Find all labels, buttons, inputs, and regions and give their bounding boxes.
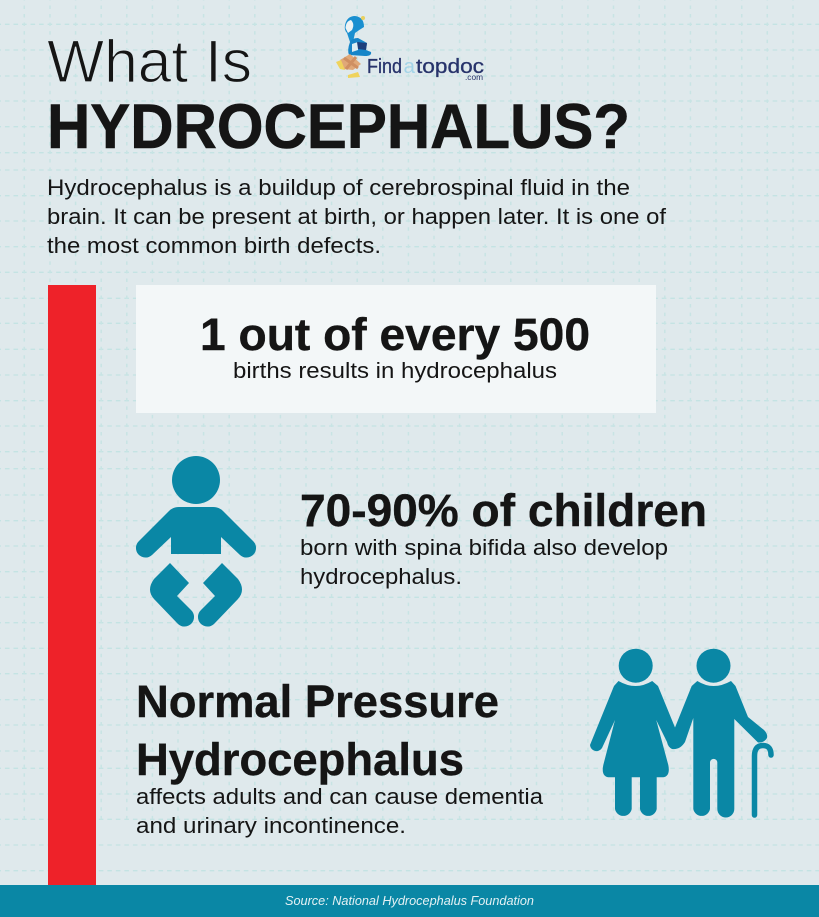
intro paragraph: the most common birth defects. — [47, 233, 381, 258]
statistic heading: 1 out of every 500 — [200, 309, 590, 360]
logo wordmark: Find — [367, 56, 402, 78]
stat description: born with spina bifida also develop — [300, 535, 668, 560]
stat description: affects adults and can cause dementia — [136, 784, 544, 809]
icon: duck mascot — [336, 16, 371, 78]
footer band — [0, 885, 819, 917]
logo wordmark: a — [404, 56, 416, 78]
stat heading — [136, 676, 499, 785]
stat heading: Hydrocephalus — [136, 734, 464, 785]
logo wordmark: topdoc — [416, 56, 484, 78]
statistic caption: births results in hydrocephalus — [233, 358, 557, 383]
intro paragraph: brain. It can be present at birth, or happen later. It is one of — [47, 204, 667, 229]
title — [47, 28, 630, 162]
stat description — [136, 784, 544, 838]
stat heading: Normal Pressure — [136, 676, 499, 727]
stat: children with spina bifida — [300, 485, 707, 589]
icon: elderly couple — [590, 649, 771, 818]
stat description — [300, 535, 668, 589]
stat heading: 70-90% of children — [300, 485, 707, 536]
red vertical bar — [48, 285, 96, 885]
intro paragraph — [47, 175, 667, 258]
stat description: and urinary incontinence. — [136, 813, 406, 838]
title: HYDROCEPHALUS? — [47, 92, 630, 162]
logo: Findatopdoc — [336, 16, 484, 82]
icon: baby — [136, 456, 256, 627]
title: What Is — [47, 28, 252, 95]
stat description: hydrocephalus. — [300, 564, 462, 589]
intro paragraph: Hydrocephalus is a buildup of cerebrospinal fluid in the — [47, 175, 630, 200]
logo: Findatopdoc: .com — [465, 73, 483, 82]
source note: Source: National Hydrocephalus Foundation — [285, 894, 534, 908]
logo wordmark — [367, 56, 484, 78]
panel: 1 out of every 500 — [136, 285, 656, 413]
stat: normal pressure hydrocephalus — [136, 676, 544, 838]
